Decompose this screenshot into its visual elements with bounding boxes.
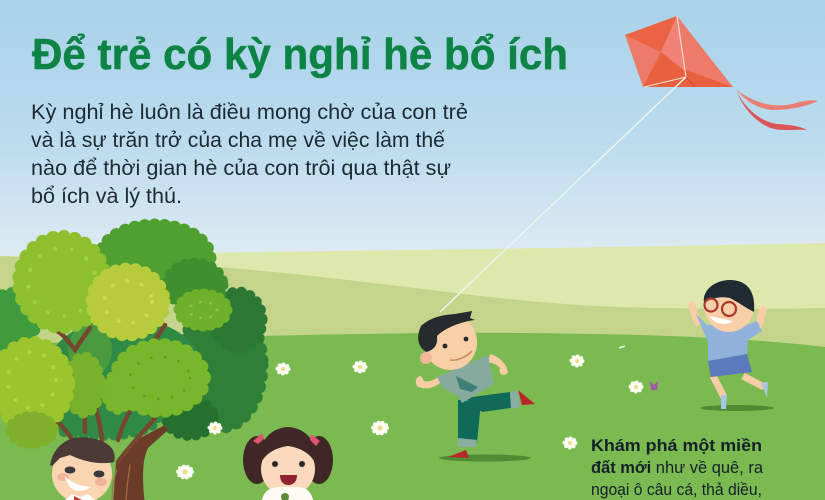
flowers <box>178 356 642 478</box>
caption: exploring new land: đất mới như về quê, ra <box>591 459 764 477</box>
foliage: central yellow-green <box>92 269 164 335</box>
title: Để trẻ có kỳ nghỉ hè bổ ích <box>32 30 568 79</box>
intro text block: nào để thời gian hè của con trôi qua thật sự <box>31 156 451 180</box>
landscape: hills and grass <box>0 243 825 500</box>
intro text block: Kỳ nghỉ hè luôn là điều mong chờ của con trẻ <box>31 100 468 124</box>
foliage: right mid green <box>179 294 227 326</box>
icon: small petal <box>619 346 625 348</box>
intro text block: bổ ích và lý thú. <box>31 184 182 208</box>
child: boy with glasses <box>692 280 774 411</box>
caption: exploring new land: ngoại ô câu cá, thả diều, <box>591 481 762 499</box>
foliage: dark back <box>182 303 262 427</box>
caption: exploring new land: Khám phá một miền <box>591 437 762 455</box>
foliage: lower left <box>68 357 100 413</box>
child: girl with pigtails <box>243 427 333 500</box>
child: boy under tree <box>50 437 115 500</box>
foliage: interior <box>47 318 203 422</box>
foliage: lower centre <box>116 345 204 411</box>
icon: kite <box>625 16 818 130</box>
interior shadow gaps <box>70 390 155 408</box>
intro text block: và là sự trăn trở của cha mẹ về việc làm thế <box>31 128 445 152</box>
sky background <box>0 0 825 270</box>
tree <box>0 225 262 500</box>
child: boy flying kite <box>416 308 535 462</box>
caption: exploring new land <box>591 437 764 499</box>
foliage: far left <box>0 293 36 347</box>
intro text block <box>31 100 468 208</box>
trunk and branches <box>47 325 168 500</box>
icon: butterfly <box>650 381 658 390</box>
kite string <box>440 77 686 312</box>
foliage: top back <box>100 225 210 291</box>
foliage: upper left light <box>19 237 105 327</box>
